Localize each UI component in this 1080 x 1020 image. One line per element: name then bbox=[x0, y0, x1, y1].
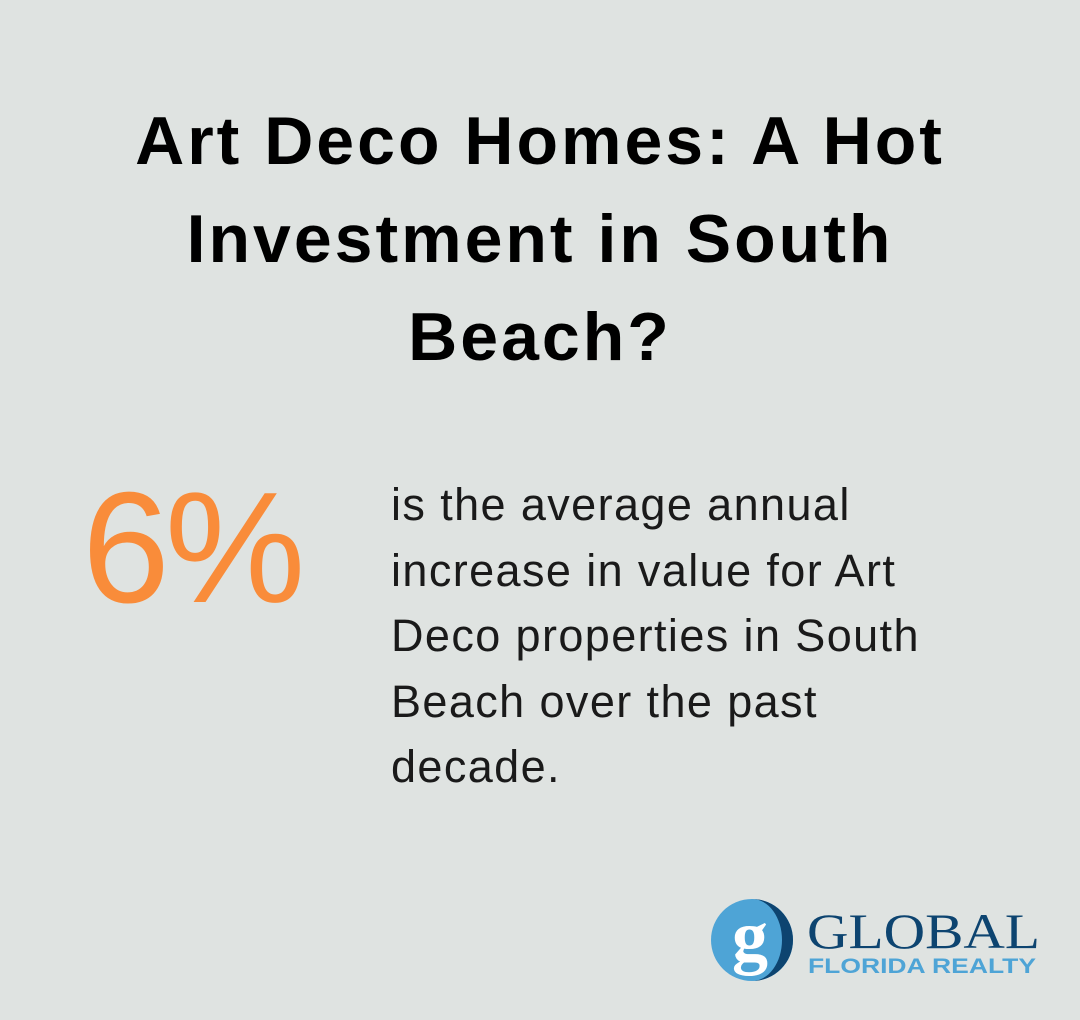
stat description bbox=[391, 479, 920, 792]
logo wordmark: GLOBAL bbox=[807, 903, 1040, 959]
stat description: increase in value for Art bbox=[391, 544, 896, 596]
logo wordmark bbox=[807, 903, 1040, 978]
logo wordmark: FLORIDA REALTY bbox=[808, 955, 1036, 978]
stat description: Deco properties in South bbox=[391, 610, 920, 661]
stat description: is the average annual bbox=[391, 479, 851, 530]
title bbox=[135, 103, 945, 375]
icon: logo circle bbox=[711, 896, 793, 981]
stat description: Beach over the past bbox=[391, 676, 818, 726]
stat number: 6% bbox=[82, 460, 300, 636]
stat description: decade. bbox=[391, 741, 561, 792]
title: Art Deco Homes: A Hot bbox=[135, 103, 945, 179]
logo bbox=[711, 898, 1040, 981]
icon: logo circle: g bbox=[732, 898, 768, 976]
title: Investment in South bbox=[187, 201, 893, 277]
title: Beach? bbox=[408, 299, 672, 375]
